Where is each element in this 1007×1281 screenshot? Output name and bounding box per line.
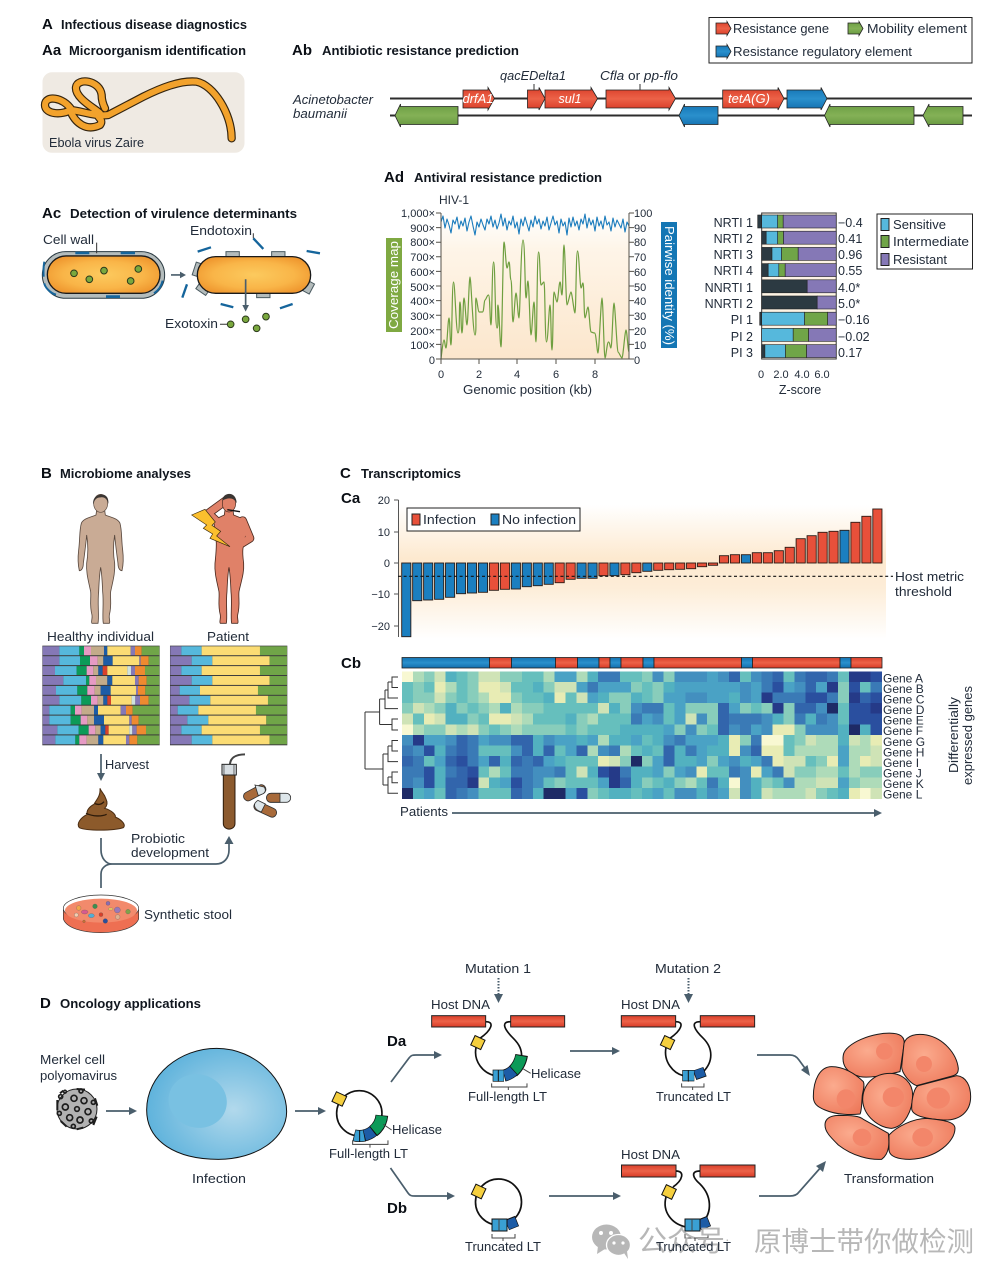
chart: healthy microbiome stacked bars (42, 646, 160, 745)
legend: infection: No infection (502, 513, 576, 527)
labels: host DNA, helicase, full-length LT (431, 998, 581, 1104)
diagram: probiotic development flow: development (131, 846, 210, 860)
heading: A Infectious disease diagnostics: A (42, 16, 53, 33)
chart: drug resistance z-scores: −0.16 (838, 313, 870, 327)
heading: B Microbiome analyses: Microbiome analyses (60, 466, 191, 481)
chart: HIV-1 coverage and identity: 0 (438, 369, 444, 381)
label: Differentially expressed genes (947, 686, 975, 785)
gene tetA(G) (723, 88, 784, 110)
gene Cfla (606, 88, 676, 110)
chart: drug resistance z-scores: NRTI 4 (714, 264, 753, 278)
coverage line (441, 240, 629, 359)
chart: HIV-1 coverage and identity: 90 (634, 223, 646, 235)
chart: host metric waterfall: −20 (371, 621, 390, 633)
icon: stool (78, 788, 124, 830)
chart: drug resistance z-scores: 0.41 (838, 232, 862, 246)
arrow: virus to cell (106, 1107, 137, 1115)
chart: HIV-1 coverage and identity: 0 (634, 355, 640, 367)
chart: HIV-1 coverage and identity: HIV-1 (439, 193, 469, 207)
legend: gene types: Mobility element (867, 22, 968, 36)
icon: viral plasmid with full-length LT (332, 1091, 392, 1148)
arrow: to transformation bottom (759, 1161, 826, 1196)
heading: B Microbiome analyses: B (41, 465, 52, 482)
diagram: probiotic development flow: Probiotic (131, 832, 185, 846)
chart: antibiotic resistance gene map: qacEDelta1 (500, 69, 566, 83)
heading: Aa Microorganism identification: Microorganism identification (69, 43, 246, 58)
icon: patient figure with abdominal pain (192, 494, 250, 623)
heading: D Oncology applications: Oncology applications (60, 996, 201, 1011)
label: Ca: Ca (341, 490, 361, 507)
icon: transformed tumour cell cluster (813, 1033, 971, 1159)
diagram: integrated truncated virus Db (622, 1165, 755, 1241)
chart: drug resistance z-scores: 4.0 (794, 369, 810, 381)
labels: genes A to L: Gene K (883, 777, 924, 791)
arrow: branch to Db (390, 1168, 455, 1200)
mobility element 2 (824, 104, 914, 127)
chart: drug resistance z-scores: 0 (758, 369, 764, 381)
chart: HIV-1 coverage and identity: 30 (634, 311, 646, 323)
labels: genes A to L (883, 672, 925, 802)
chart: HIV-1 coverage and identity: 80 (634, 237, 646, 249)
chart: HIV-1 coverage and identity: 700× (410, 252, 435, 264)
legend: infection: Infection (423, 513, 476, 527)
label: Differentially expressed genes: expressed genes (961, 686, 975, 785)
labels: host DNA, helicase, full-length LT: Helicase (531, 1067, 581, 1081)
heading: Aa Microorganism identification: Aa (42, 42, 62, 59)
chart: drug resistance z-scores: −0.4 (838, 216, 863, 230)
chart: drug resistance z-scores: NRTI 1 (714, 216, 753, 230)
icon: healthy individual figure (78, 494, 123, 623)
chart: drug resistance z-scores: −0.02 (838, 330, 870, 344)
chart: HIV-1 coverage and identity: 2 (476, 369, 482, 381)
legend: sensitive / intermediate / resistant: Resistant (893, 253, 948, 267)
diagram: virulence determinants cells: Exotoxin (165, 317, 218, 331)
label: Ebola virus Zaire: Ebola virus Zaire (49, 136, 144, 150)
chart: drug resistance z-scores: 2.0 (773, 369, 789, 381)
chart: host metric waterfall: −10 (371, 589, 390, 601)
chart: drug resistance z-scores: NNRTI 2 (705, 297, 753, 311)
diagram: virulence determinants cells: Cell wall (43, 233, 94, 247)
chart: HIV-1 coverage and identity: Genomic position (kb) (463, 383, 592, 397)
identity line (441, 214, 629, 235)
icon: polyomavirus particle (57, 1089, 97, 1129)
label: truncated LT Db: Truncated LT (465, 1240, 541, 1254)
arrow: mutation 1 to truncated (570, 1047, 620, 1055)
labels: genes A to L: Gene E (883, 714, 924, 728)
heading: C Transcriptomics: Transcriptomics (361, 466, 461, 481)
chart: HIV-1 coverage and identity: 70 (634, 252, 646, 264)
chart: HIV-1 coverage and identity: 200× (410, 326, 435, 338)
chart: antibiotic resistance gene map (292, 69, 972, 127)
chart: host metric waterfall: 20 (378, 495, 390, 507)
legend: gene types: Resistance gene (733, 22, 829, 36)
watermark: 公众号 (638, 1226, 725, 1258)
chart: HIV-1 coverage and identity: 50 (634, 282, 646, 294)
arrow: branch to Da (391, 1051, 442, 1082)
chart: drug resistance z-scores: 6.0 (814, 369, 830, 381)
annotation: mutation 2: Mutation 2 (655, 962, 721, 976)
labels: genes A to L: Gene L (883, 788, 923, 802)
chart: drug resistance z-scores: 0.96 (838, 248, 862, 262)
gene qacEDelta1 (528, 88, 545, 110)
chart: HIV-1 coverage and identity: 20 (634, 326, 646, 338)
label: truncated LT (over watermark): Truncated LT (656, 1240, 731, 1254)
label: Patient: Patient (207, 630, 250, 644)
icon: ebola virus filament (45, 81, 232, 138)
chart: host metric waterfall: 0 (384, 558, 390, 570)
label: Healthy individual: Healthy individual (47, 630, 154, 644)
chart: HIV-1 coverage and identity: 100× (410, 340, 435, 352)
chart: HIV-1 coverage and identity: 600× (410, 267, 435, 279)
chart: drug resistance z-scores: PI 1 (731, 313, 753, 327)
chart: sample infection annotation bar (402, 658, 882, 668)
watermark: 原博士带你做检测 (754, 1226, 974, 1257)
heading: Ac Detection of virulence determinants: Detection of virulence determinants (70, 206, 297, 221)
chart: HIV-1 coverage and identity: 900× (410, 223, 435, 235)
icon: intact bacterium (42, 252, 165, 298)
label: Merkel cell polyomavirus: Merkel cell (40, 1053, 105, 1067)
labels: host DNA, helicase, full-length LT: Full-length LT (468, 1090, 547, 1104)
chart: drug resistance z-scores: 0.55 (838, 264, 862, 278)
icon: petri dish (63, 895, 139, 933)
chart: HIV-1 coverage and identity: 40 (634, 296, 646, 308)
chart: host metric waterfall (371, 495, 964, 639)
labels: genes A to L: Gene A (883, 672, 923, 686)
heading: Ad Antiviral resistance prediction: Antiviral resistance prediction (414, 170, 602, 185)
chart: host metric waterfall: threshold (895, 585, 952, 599)
legend: sensitive / intermediate / resistant: Sensitive (893, 218, 946, 232)
icon: lysed bacterium with toxins (97, 233, 320, 332)
labels: genes A to L: Gene C (883, 693, 925, 707)
chart: HIV-1 coverage and identity: 400× (410, 296, 435, 308)
threshold line (398, 575, 893, 577)
legend: sensitive / intermediate / resistant (877, 214, 972, 269)
diagram: probiotic development flow: Harvest (105, 758, 150, 772)
diagram: virulence determinants cells: Endotoxin (190, 224, 252, 238)
axis tag: Coverage map: Coverage map (387, 241, 401, 329)
chart: HIV-1 coverage and identity: 10 (634, 340, 646, 352)
labels: host DNA, truncated LT: Host DNA (621, 998, 681, 1012)
mobility element 3 (923, 104, 963, 127)
heading: A Infectious disease diagnostics: Infectious disease diagnostics (61, 17, 247, 32)
watermark: · (725, 1231, 730, 1247)
label: Da: Da (387, 1033, 407, 1050)
chart: HIV-1 coverage and identity: 300× (410, 311, 435, 323)
labels: genes A to L: Gene D (883, 703, 925, 717)
chart: host metric waterfall: 10 (378, 527, 390, 539)
heading: Ac Detection of virulence determinants: Ac (42, 205, 61, 222)
labels: host DNA: Host DNA (621, 1148, 681, 1162)
labels: genes A to L: Gene J (883, 766, 922, 780)
chart: HIV-1 coverage and identity: 6 (553, 369, 559, 381)
regulatory element top (787, 88, 827, 110)
labels: host DNA, truncated LT (621, 998, 731, 1104)
heading: Ab Antibiotic resistance prediction: Ab (292, 42, 312, 59)
arrow: to transformation top (757, 1055, 810, 1076)
diagram: probiotic development flow (63, 754, 291, 933)
legend: infection (407, 508, 580, 531)
chart: HIV-1 coverage and identity: 800× (410, 237, 435, 249)
label: Differentially expressed genes: Differentially (947, 696, 961, 773)
chart: antibiotic resistance gene map: tetA(G) (728, 92, 770, 106)
heading: C Transcriptomics: C (340, 465, 351, 482)
chart: antibiotic resistance gene map: baumanii (293, 107, 348, 121)
labels: genes A to L: Gene F (883, 724, 923, 738)
label: Merkel cell polyomavirus (40, 1053, 117, 1083)
label and arrow: Patients: Patients (400, 805, 448, 819)
diagram: integrated virus full-length LT (432, 1016, 565, 1090)
annotation: mutation 1: Mutation 1 (465, 962, 531, 976)
chart: antibiotic resistance gene map: sul1 (559, 92, 581, 106)
chart: HIV-1 coverage and identity: 0 (429, 355, 435, 367)
chart: HIV-1 coverage and identity: 1,000× (401, 208, 435, 220)
chart: HIV-1 coverage and identity: 60 (634, 267, 646, 279)
label: Cb: Cb (341, 655, 361, 672)
chart: drug resistance z-scores: 5.0* (838, 297, 860, 311)
watermark (592, 1224, 974, 1259)
heading: D Oncology applications: D (40, 995, 51, 1012)
label: Infection: Infection (192, 1172, 246, 1186)
icon: probiotic tube and capsules (222, 754, 291, 829)
legend: gene types: Resistance regulatory element (733, 45, 913, 59)
chart: HIV-1 coverage and identity: 8 (592, 369, 598, 381)
chart: drug resistance z-scores: 0.17 (838, 346, 862, 360)
annotation: mutation 2 (655, 962, 721, 1003)
legend: sensitive / intermediate / resistant: Intermediate (893, 235, 969, 249)
label: Merkel cell polyomavirus: polyomavirus (40, 1069, 117, 1083)
chart: HIV-1 coverage and identity: 100 (634, 208, 652, 220)
labels: genes A to L: Gene H (883, 745, 924, 759)
chart: drug resistance z-scores: NRTI 3 (714, 248, 753, 262)
chart: drug resistance z-scores: PI 2 (731, 330, 753, 344)
labels: helicase and LT (329, 1123, 442, 1161)
annotation: mutation 1 (465, 962, 531, 1003)
axis tag: Pairwise identity: Pairwise identity (%) (662, 226, 676, 345)
labels: genes A to L: Gene I (883, 756, 919, 770)
arrow: Db to integrated (549, 1192, 621, 1200)
panel: Ebola virus Zaire (42, 72, 244, 153)
labels: host DNA, helicase, full-length LT: Host DNA (431, 998, 491, 1012)
chart: antibiotic resistance gene map: drfA1 (462, 92, 494, 106)
labels: genes A to L: Gene B (883, 682, 924, 696)
diagram: episomal truncated virus Db (471, 1179, 522, 1241)
arrow: harvest (100, 754, 102, 776)
chart: drug resistance z-scores (705, 213, 870, 397)
legend: gene types (709, 18, 972, 63)
arrow: probiotic development (101, 838, 229, 888)
chart: antibiotic resistance gene map: Cfla or pp-flo (600, 69, 678, 83)
chart: host metric waterfall: Host metric (895, 570, 964, 584)
icon: infected cell (147, 1048, 287, 1159)
chart: drug resistance z-scores: PI 3 (731, 346, 753, 360)
heading: Ad Antiviral resistance prediction: Ad (384, 169, 404, 186)
labels: host DNA, truncated LT: Truncated LT (656, 1090, 731, 1104)
chart: dendrogram (365, 677, 398, 793)
chart: drug resistance z-scores: Z-score (779, 383, 821, 397)
chart: drug resistance z-scores: 4.0* (838, 281, 860, 295)
labels: helicase and LT: Helicase (392, 1123, 442, 1137)
chart: antibiotic resistance gene map: Acinetobacter (292, 93, 374, 107)
chart: drug resistance z-scores: NRTI 2 (714, 232, 753, 246)
chart: HIV-1 coverage and identity (386, 193, 677, 397)
labels: helicase and LT: Full-length LT (329, 1147, 408, 1161)
heading: Ab Antibiotic resistance prediction: Antibiotic resistance prediction (322, 43, 519, 58)
chart: drug resistance z-scores: NNRTI 1 (705, 281, 753, 295)
chart: HIV-1 coverage and identity: 4 (514, 369, 520, 381)
chart: patient microbiome stacked bars (170, 646, 287, 745)
diagram: virulence determinants cells (42, 224, 320, 332)
regulatory element bottom (679, 104, 718, 127)
chart: HIV-1 coverage and identity: 500× (410, 282, 435, 294)
labels: genes A to L: Gene G (883, 735, 925, 749)
diagram: probiotic development flow: Synthetic stool (144, 908, 232, 922)
gene drfA1 (463, 88, 494, 110)
label: Transformation: Transformation (844, 1172, 934, 1186)
label and arrow: Patients (400, 805, 882, 819)
mobility element 1 (395, 104, 458, 127)
diagram: integrated virus truncated LT (621, 1016, 755, 1090)
gene sul1 (545, 88, 598, 110)
label: Db: Db (387, 1200, 407, 1217)
arrow: cell to integrated virus (295, 1107, 326, 1115)
chart: gene expression heatmap (402, 671, 882, 799)
